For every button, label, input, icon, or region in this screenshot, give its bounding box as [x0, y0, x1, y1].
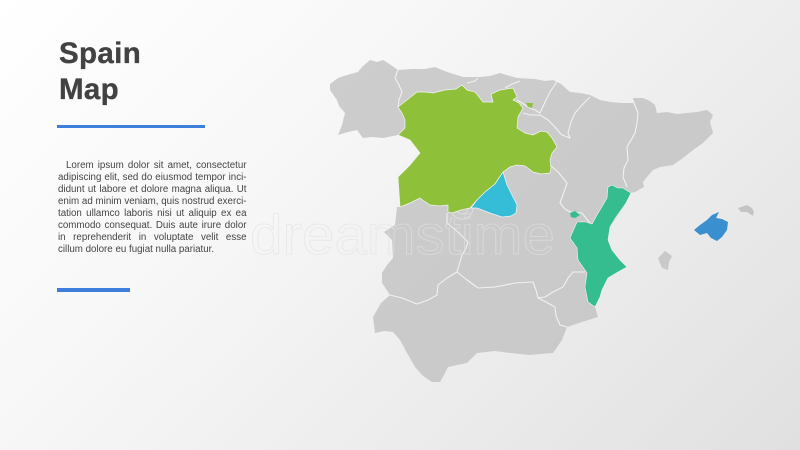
region: Madrid (cyan)	[471, 172, 517, 217]
watermark: dreamstime	[250, 203, 555, 266]
enclave: Rincon de Ademuz (teal)	[570, 211, 580, 218]
accent bar: bottom	[57, 288, 130, 292]
text block: adipiscing elit, sed do eiusmod tempor inci-	[58, 172, 246, 183]
Menorca	[738, 205, 754, 216]
enclave: Trevino (green)	[526, 103, 533, 108]
Ibiza	[658, 251, 672, 270]
grey mainland	[330, 60, 754, 382]
text block: cillum dolore eu fugiat nulla pariatur.	[58, 244, 214, 255]
text block: commodo consequat. Duis aute irure dolor	[58, 220, 246, 231]
title	[59, 36, 141, 106]
region borders	[390, 70, 638, 327]
region: Valencia (teal)	[570, 185, 631, 307]
title: Map	[59, 72, 119, 106]
text block: didunt ut labore et dolore magna aliqua. Ut	[58, 184, 246, 195]
accent bar: top	[57, 124, 205, 128]
text block: in reprehenderit in voluptate velit esse	[58, 232, 246, 243]
region: Castilla y Leon (green)	[398, 85, 557, 213]
text block	[58, 160, 247, 255]
title: Spain	[59, 36, 141, 70]
island: Mallorca (blue)	[694, 212, 728, 241]
text block: tation ullamco laboris nisi ut aliquip ex ea	[58, 208, 246, 219]
text block: enim ad minim veniam, quis nostrud exerci-	[58, 196, 246, 207]
text block: Lorem ipsum dolor sit amet, consectetur	[66, 160, 246, 171]
